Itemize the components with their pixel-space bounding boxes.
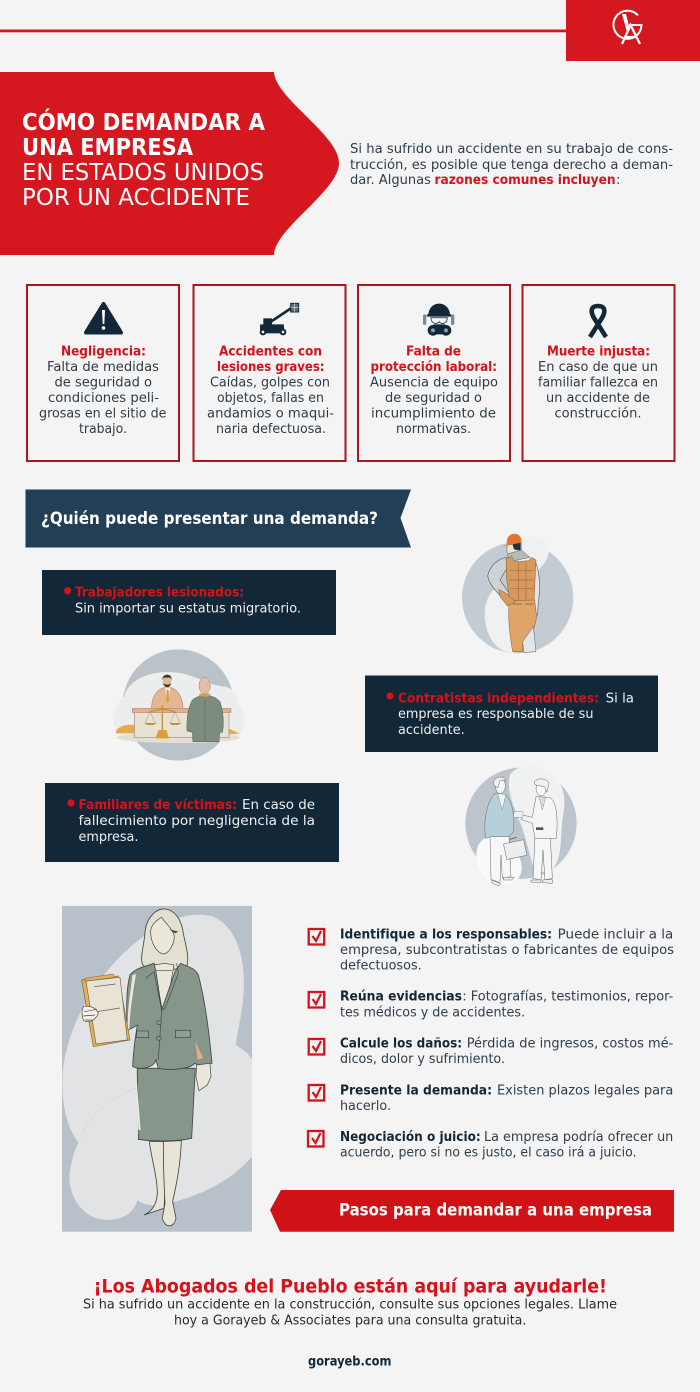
intro text: : [616, 173, 620, 188]
card: familiares de víctimas: Familiares de víctimas: [78, 797, 237, 813]
panel: lesiones graves [194, 285, 346, 461]
illustration: two businessmen [465, 766, 577, 886]
card: familiares de víctimas: fallecimiento por negligencia de la [78, 814, 315, 829]
illustration: lawyer woman with clipboard [62, 906, 252, 1232]
panel: negligencia: Negligencia: [61, 344, 146, 360]
logo block [566, 0, 700, 61]
step: identifique: empresa, subcontratistas o fabricantes de equipos [340, 943, 674, 958]
intro text: razones comunes incluyen [434, 173, 616, 188]
heading banner: quién puede presentar [26, 490, 411, 548]
title: POR UN ACCIDENTE [22, 185, 250, 211]
panel: protección laboral [358, 285, 510, 461]
title [22, 108, 265, 211]
intro text: Si ha sufrido un accidente en su trabajo de cons- [350, 142, 673, 157]
panel: muerte injusta: En caso de que un [538, 360, 658, 375]
panel: negligencia: Falta de medidas [47, 360, 159, 375]
step: presente la demanda: hacerlo. [340, 1099, 391, 1114]
icon: helmet and respirator [423, 304, 454, 336]
step: identifique: defectuosos. [340, 959, 422, 974]
panel: protección laboral: de seguridad o [385, 391, 482, 406]
panel: muerte injusta [522, 285, 674, 461]
heading banner: pasos para demandar: Pasos para demandar a una empresa [339, 1201, 652, 1220]
intro text [350, 142, 673, 188]
panel: muerte injusta: construcción. [554, 406, 642, 422]
panel: negligencia [27, 285, 179, 461]
panel: lesiones graves: Caídas, golpes con [210, 375, 330, 391]
card: contratistas independientes: Si la [606, 691, 634, 706]
step: negociación o juicio: acuerdo, pero si no es justo, el caso irá a juicio. [340, 1145, 636, 1161]
card: trabajadores lesionados: Trabajadores lesionados: [75, 586, 244, 601]
panel: lesiones graves: Accidentes con [219, 344, 322, 360]
step: reúna evidencias: Reúna evidencias [340, 989, 462, 1005]
card: familiares de víctimas: empresa. [78, 830, 138, 845]
footer call to action: ¡Los Abogados del Pueblo están aquí para ayudarle! [94, 1276, 607, 1298]
step: negociación o juicio: La empresa podría ofrecer un [484, 1129, 673, 1145]
step: identifique [309, 927, 674, 974]
step: negociación o juicio: Negociación o juicio: [340, 1129, 481, 1145]
panel: protección laboral: Falta de [406, 344, 461, 360]
icon: crane [260, 303, 299, 335]
step: presente la demanda: Presente la demanda: [340, 1083, 492, 1098]
footer call to action: hoy a Gorayeb & Associates para una consulta gratuita. [174, 1313, 526, 1328]
panel: muerte injusta: Muerte injusta: [547, 344, 650, 360]
panel: negligencia: de seguridad o [54, 376, 152, 391]
card: contratistas independientes: Contratistas independientes: [398, 691, 599, 706]
step: calcule los daños: Calcule los daños: [340, 1036, 462, 1051]
card: trabajadores lesionados [42, 570, 336, 635]
step: identifique: Identifique a los responsables: [340, 927, 552, 942]
step: calcule los daños: Pérdida de ingresos, costos mé- [467, 1035, 674, 1051]
card: contratistas independientes [365, 676, 658, 752]
intro text: dar. Algunas [350, 173, 431, 188]
heading banner: pasos para demandar [270, 1190, 674, 1232]
panel: protección laboral: Ausencia de equipo [370, 376, 498, 391]
footer call to action: Si ha sufrido un accidente en la construcción, consulte sus opciones legales. Llame [83, 1296, 617, 1312]
footer call to action [83, 1276, 617, 1328]
step: reúna evidencias [309, 989, 674, 1020]
checklist: pasos [308, 927, 674, 1161]
panel: protección laboral: normativas. [396, 422, 471, 437]
website: gorayeb.com [308, 1355, 391, 1370]
title: CÓMO DEMANDAR A [22, 108, 265, 136]
card: contratistas independientes: accidente. [398, 723, 465, 738]
panel: muerte injusta: un accidente de [546, 391, 650, 406]
step: negociación o juicio [308, 1129, 673, 1161]
card: contratistas independientes: empresa es responsable de su [398, 707, 594, 722]
card: trabajadores lesionados: Sin importar su estatus migratorio. [75, 602, 301, 617]
panel: lesiones graves: objetos, fallas en [217, 391, 324, 406]
icon: ribbon [590, 306, 606, 337]
illustration: construction worker [462, 534, 573, 653]
card: familiares de víctimas: En caso de [242, 798, 315, 813]
panel: lesiones graves: naria defectuosa. [216, 422, 326, 437]
intro text: trucción, es posible que tenga derecho a deman- [350, 157, 673, 173]
heading banner: quién puede presentar: ¿Quién puede presentar una demanda? [41, 509, 378, 528]
panel: lesiones graves: lesiones graves: [217, 360, 324, 375]
panel: protección laboral: incumplimiento de [371, 407, 496, 422]
step: calcule los daños: dicos, dolor y sufrimiento. [340, 1052, 505, 1067]
card: familiares de víctimas [45, 783, 339, 862]
panel: lesiones graves: andamios o maqui- [207, 407, 334, 422]
step: presente la demanda: Existen plazos legales para [497, 1083, 673, 1098]
title: EN ESTADOS UNIDOS [22, 160, 264, 186]
panel: negligencia: condiciones peli- [48, 391, 159, 406]
hero banner [0, 72, 339, 255]
title: UNA EMPRESA [22, 135, 193, 161]
panel: negligencia: trabajo. [79, 422, 127, 437]
panel: negligencia: grosas en el sitio de [39, 407, 166, 422]
step: reúna evidencias: tes médicos y de accidentes. [340, 1004, 525, 1020]
icon: warning triangle [86, 304, 121, 332]
step: reúna evidencias: : Fotografías, testimonios, repor- [462, 989, 674, 1005]
step: presente la demanda [309, 1083, 673, 1114]
panel: muerte injusta: familiar fallezca en [538, 376, 658, 391]
step: calcule los daños [309, 1035, 674, 1067]
step: identifique: Puede incluir a la [558, 927, 673, 942]
panel: protección laboral: protección laboral: [370, 359, 497, 375]
illustration: court with judge and scales [114, 649, 245, 761]
